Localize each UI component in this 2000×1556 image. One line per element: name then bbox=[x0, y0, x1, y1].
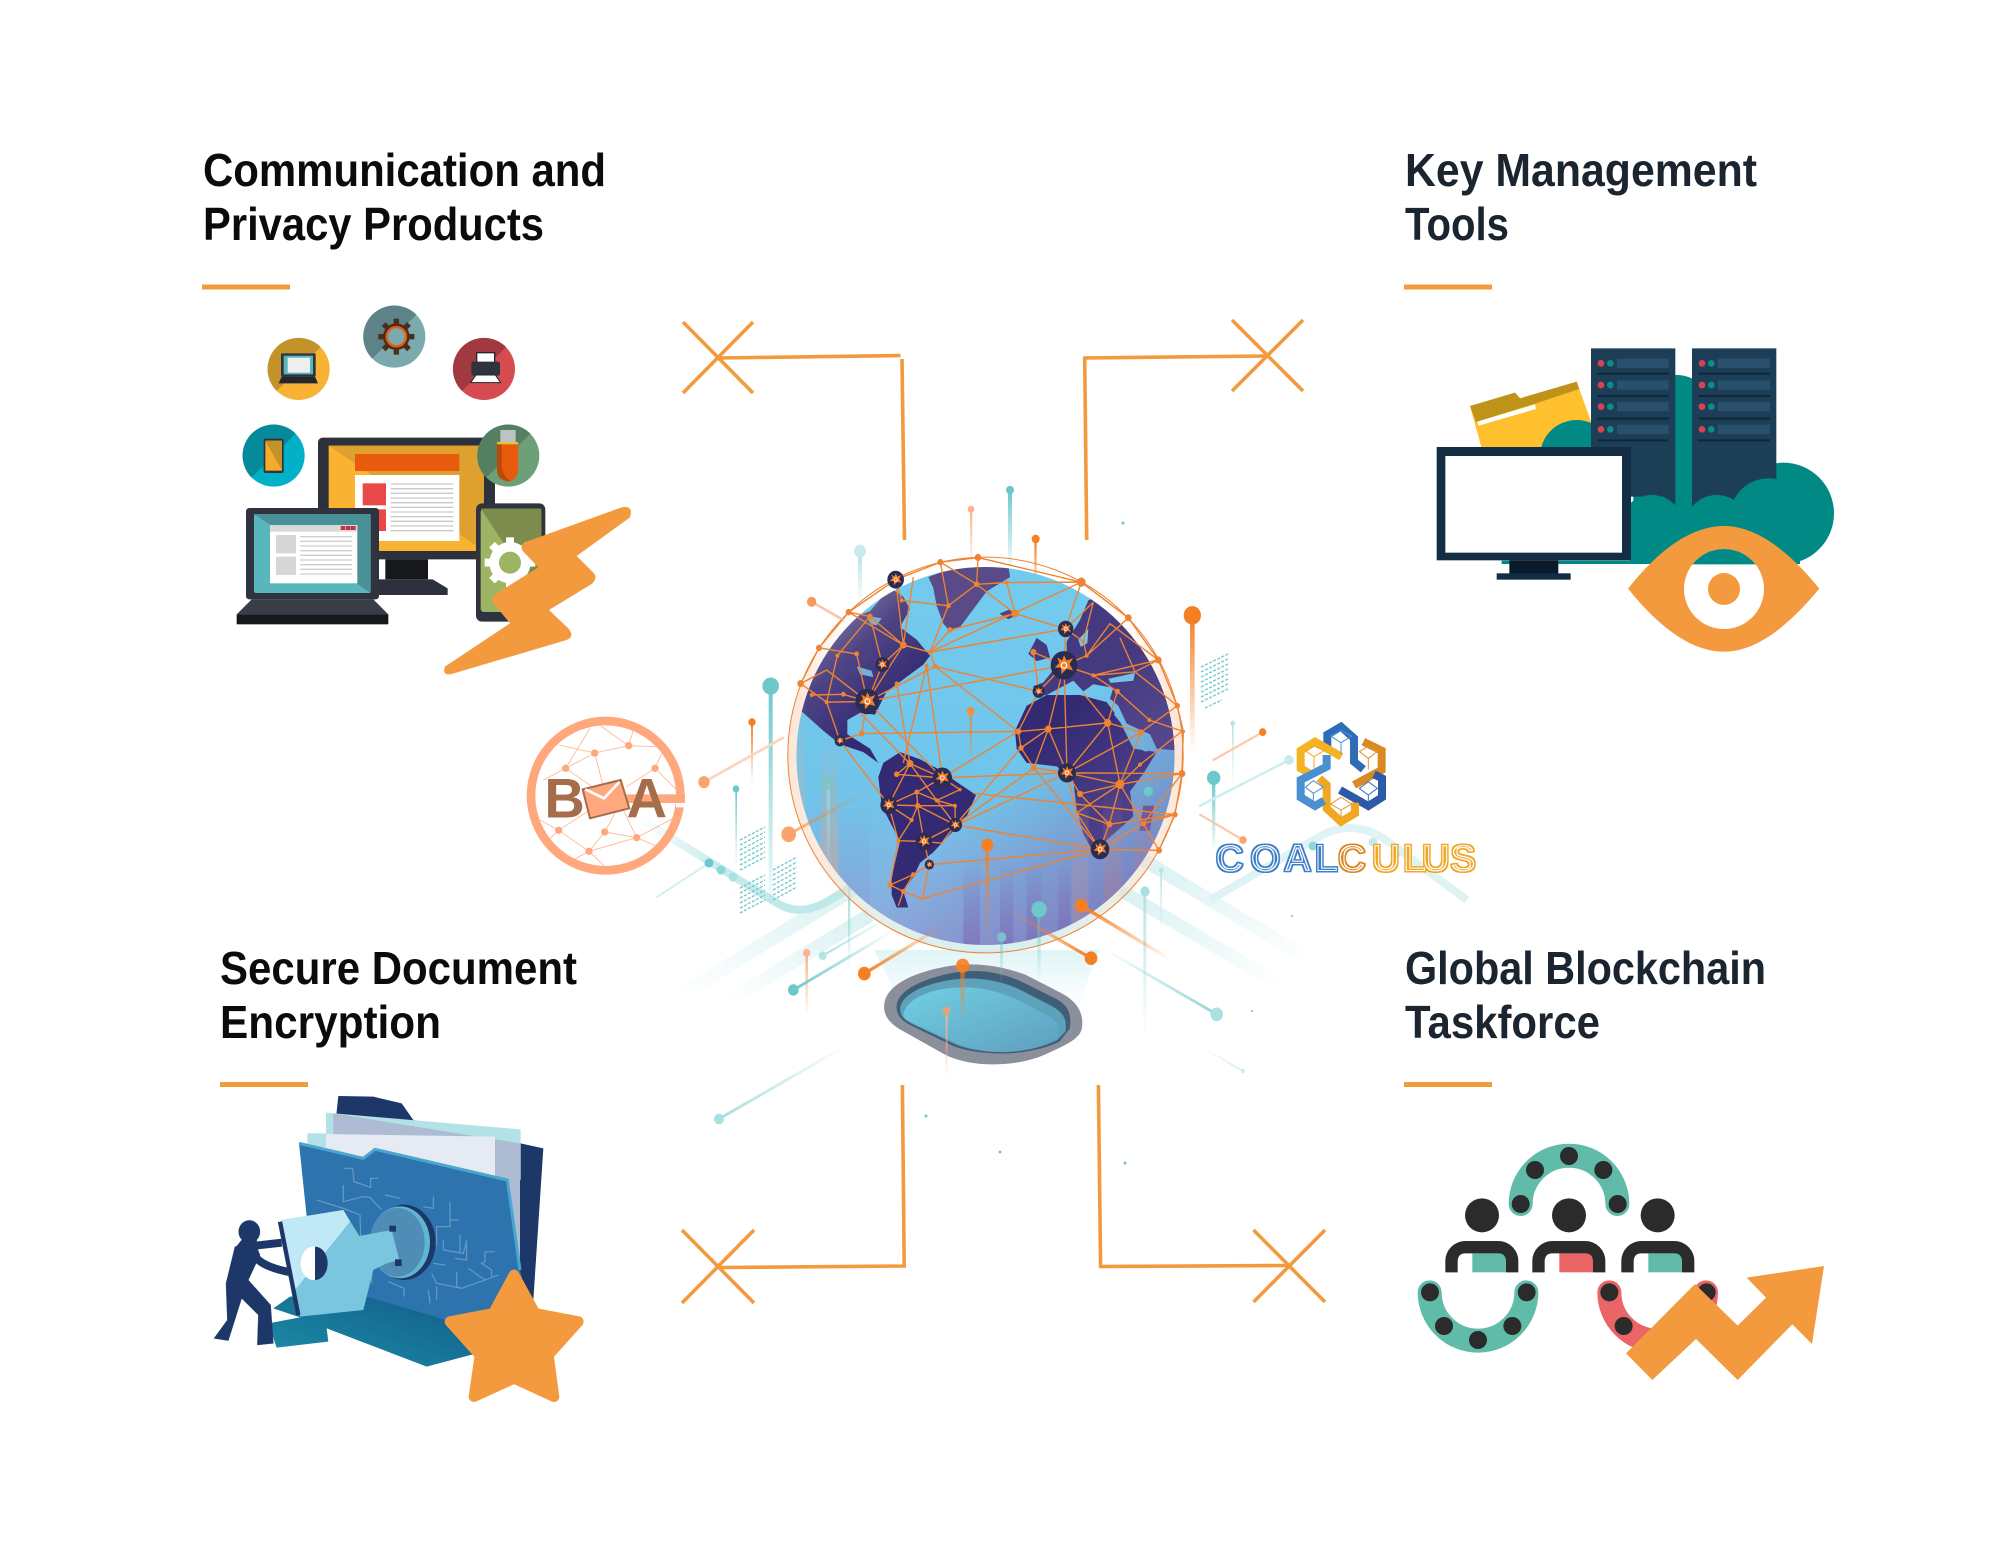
pin: top orange bbox=[1032, 535, 1040, 600]
monitor bbox=[318, 438, 495, 595]
network nodes bbox=[797, 554, 1185, 900]
connector: bottom-left arrow with X bbox=[682, 1085, 904, 1303]
teal circuit band right bbox=[1210, 828, 1467, 900]
icon: communication devices and lightning bolt bbox=[237, 306, 631, 674]
pin: peach basin bbox=[943, 1007, 951, 1079]
ring bbox=[531, 721, 680, 870]
diagonal orange pins bbox=[781, 597, 1170, 980]
pin: teal tall left bbox=[762, 677, 779, 915]
pin: teal on globe left bbox=[822, 776, 835, 890]
outer ring bbox=[788, 557, 1183, 953]
icon: lightning bolt bbox=[444, 507, 631, 674]
data text dashes right bbox=[1201, 654, 1228, 708]
person centre bbox=[1532, 1198, 1605, 1272]
location badges bbox=[835, 571, 1109, 870]
title: Key Management Tools: Key Management bbox=[1405, 144, 1757, 196]
title: Key Management Tools bbox=[1404, 144, 1757, 290]
folder front bbox=[299, 1143, 533, 1323]
pin: BMA orange bbox=[748, 718, 756, 783]
continents bbox=[790, 560, 1193, 952]
wordmark: ULUS bbox=[1372, 837, 1476, 881]
folder shadow bbox=[268, 1293, 477, 1367]
pins in front of globe bbox=[781, 597, 1170, 1079]
data text dashes left bbox=[740, 827, 797, 913]
pin: BMA teal bbox=[733, 785, 739, 867]
background circuit stripes bbox=[680, 858, 1310, 1000]
person right bbox=[1621, 1198, 1694, 1272]
globe shading bbox=[906, 686, 1174, 945]
cloud front bbox=[1620, 478, 1807, 564]
wordmark: C bbox=[1338, 837, 1366, 881]
pin: orange tall right bbox=[1184, 606, 1201, 751]
pin: pale lower right bbox=[1159, 867, 1164, 934]
Greenland bbox=[928, 565, 1010, 631]
icon: key management servers, cloud, eye bbox=[1437, 348, 1834, 652]
title: Communication and Privacy Products: Privacy Products bbox=[203, 198, 544, 250]
logo: BMA: A bbox=[627, 766, 667, 829]
pin: peach bottom left bbox=[803, 949, 810, 1017]
network dots bbox=[555, 742, 659, 855]
South America bbox=[878, 752, 976, 907]
icon: secure document folder with key and star bbox=[214, 1096, 578, 1397]
light cone bbox=[874, 950, 1100, 1007]
documents bbox=[307, 1113, 521, 1287]
person silhouette bbox=[214, 1220, 291, 1345]
logo: BMA bbox=[531, 721, 688, 870]
key bbox=[280, 1210, 402, 1317]
icon: laptop badge bbox=[268, 338, 330, 400]
folder back bbox=[333, 1096, 543, 1300]
cloud back bbox=[1502, 375, 1834, 564]
network lines bbox=[540, 726, 677, 868]
title: Global Blockchain Taskforce: Taskforce bbox=[1405, 996, 1600, 1048]
icon: phone badge bbox=[243, 425, 305, 487]
server rack right bbox=[1692, 348, 1776, 507]
phone bbox=[476, 503, 545, 622]
Europe and Asia bbox=[1033, 599, 1174, 750]
title: Communication and Privacy Products: Communication and bbox=[203, 144, 606, 196]
top arc seats bbox=[1512, 1147, 1627, 1213]
Madagascar bbox=[1139, 806, 1154, 831]
North America bbox=[790, 588, 930, 763]
teal circuit band left bbox=[637, 817, 870, 910]
envelope bbox=[583, 780, 629, 818]
wordmark: B bbox=[544, 766, 585, 829]
pin: teal base bbox=[997, 932, 1006, 985]
icon: rising arrow bbox=[1626, 1266, 1824, 1380]
pins behind globe bbox=[698, 486, 1294, 1124]
pedestal rim bbox=[884, 964, 1082, 1064]
pin: orange base bbox=[956, 959, 969, 1023]
cube chain bbox=[1301, 727, 1382, 822]
pin: teal bottom left bbox=[845, 839, 854, 972]
icon: blockchain taskforce team and arrow bbox=[1421, 1147, 1824, 1380]
gap and bar bbox=[676, 801, 688, 807]
folder bbox=[1470, 382, 1592, 448]
connector: bottom-right arrow with X bbox=[1098, 1085, 1325, 1302]
icon: star bbox=[450, 1275, 578, 1397]
decorative specks bbox=[924, 522, 1293, 1164]
pin: centre orange large bbox=[981, 839, 993, 941]
pin: pale teal top bbox=[854, 545, 866, 605]
connector: top-left arrow with X bbox=[683, 322, 904, 540]
person left bbox=[1445, 1198, 1518, 1272]
pin: top peach bbox=[968, 506, 974, 566]
Iceland bbox=[999, 609, 1019, 619]
wordmark bbox=[1215, 837, 1476, 881]
pin: teal right bbox=[1207, 771, 1220, 853]
title: Secure Document Encryption bbox=[220, 942, 577, 1087]
title: Global Blockchain Taskforce bbox=[1404, 942, 1766, 1087]
globe pedestal bbox=[874, 950, 1100, 1064]
outer halo bbox=[792, 562, 1178, 948]
ocean bbox=[796, 567, 1174, 945]
inland seas bbox=[1078, 629, 1148, 751]
icon: gear badge bbox=[363, 306, 425, 368]
pin: teal lower centre bbox=[1031, 901, 1047, 982]
globe with network bbox=[788, 554, 1193, 953]
title: Communication and Privacy Products bbox=[202, 144, 606, 290]
title: Global Blockchain Taskforce: Global Blockchain bbox=[1405, 942, 1766, 994]
lakes bbox=[857, 616, 882, 677]
pin: teal lower right bbox=[1140, 886, 1150, 1038]
lock disc bbox=[370, 1205, 436, 1280]
laptop bbox=[237, 508, 388, 624]
fade stripes bbox=[797, 699, 1153, 949]
logo: Coalculus bbox=[1215, 727, 1476, 881]
title: Secure Document Encryption: Secure Document bbox=[220, 942, 577, 994]
connector: top-right arrow with X bbox=[1085, 320, 1303, 540]
title: Secure Document Encryption: Encryption bbox=[220, 996, 441, 1048]
diagonal teal pins bbox=[698, 728, 1294, 1124]
basin bbox=[897, 971, 1070, 1053]
icon: eye bbox=[1628, 526, 1819, 652]
UK bbox=[1028, 638, 1050, 661]
network connections bbox=[788, 557, 1183, 953]
Africa bbox=[1015, 695, 1157, 852]
pin: top teal bbox=[1006, 486, 1014, 572]
icon: usb badge bbox=[477, 425, 539, 487]
bottom-left arc seats bbox=[1421, 1283, 1536, 1349]
pin: teal on globe right bbox=[1144, 786, 1153, 796]
monitor bbox=[1437, 447, 1631, 580]
icon: printer badge bbox=[453, 338, 515, 400]
cube outlines bbox=[1305, 731, 1377, 817]
connections bbox=[801, 557, 1183, 906]
title: Key Management Tools: Tools bbox=[1405, 198, 1509, 250]
wordmark: COAL bbox=[1215, 837, 1338, 881]
pin: pale right bbox=[1230, 721, 1235, 787]
pin: centre orange small bbox=[967, 707, 975, 768]
bottom-right arc seats bbox=[1600, 1283, 1716, 1341]
server rack left bbox=[1591, 348, 1675, 505]
